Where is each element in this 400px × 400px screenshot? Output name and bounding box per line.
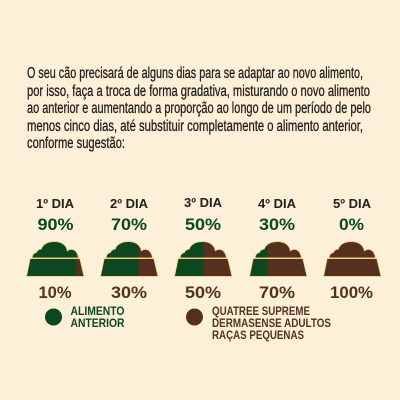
- bowl: day 2: [100, 241, 158, 277]
- bowl: day 5: [323, 241, 381, 277]
- bowl: day 4: [249, 241, 308, 277]
- day 2 column: 30%: [111, 283, 147, 302]
- day 3 column: 50%: [185, 215, 221, 234]
- day 4 column: 4º DIA: [258, 196, 297, 211]
- day 2 column: 70%: [111, 215, 147, 234]
- day 5 column: 0%: [339, 215, 364, 234]
- legend: alimento anterior: ANTERIOR: [70, 316, 125, 330]
- bowl: day 3: [174, 241, 232, 277]
- legend: alimento anterior: [45, 304, 125, 330]
- day 5 column: 5º DIA: [333, 196, 372, 211]
- day 3 column: [174, 195, 232, 302]
- day 4 column: [249, 196, 308, 302]
- day 1 column: 10%: [38, 283, 72, 302]
- day 5 column: 100%: [330, 283, 373, 302]
- legend: alimento anterior: ALIMENTO: [70, 304, 124, 318]
- day 5 column: [323, 196, 381, 302]
- legend: quatree supreme: QUATREE SUPREME: [212, 304, 310, 318]
- intro text block: conforme sugestão:: [27, 135, 125, 152]
- day 1 column: 90%: [38, 215, 74, 234]
- intro text block: [27, 65, 371, 152]
- day 4 column: 70%: [259, 283, 295, 302]
- day 3 column: 50%: [185, 283, 221, 302]
- day 2 column: [100, 196, 158, 302]
- legend: quatree supreme: DERMASENSE ADULTOS: [212, 316, 331, 330]
- day 1 column: 1º DIA: [36, 196, 75, 211]
- day 3 column: 3º DIA: [184, 195, 223, 210]
- day 4 column: 30%: [259, 215, 295, 234]
- bowl: day 1: [26, 241, 84, 277]
- day 1 column: [26, 196, 84, 302]
- legend: quatree supreme: [186, 304, 331, 342]
- day 2 column: 2º DIA: [110, 196, 149, 211]
- legend: quatree supreme: RAÇAS PEQUENAS: [212, 328, 304, 342]
